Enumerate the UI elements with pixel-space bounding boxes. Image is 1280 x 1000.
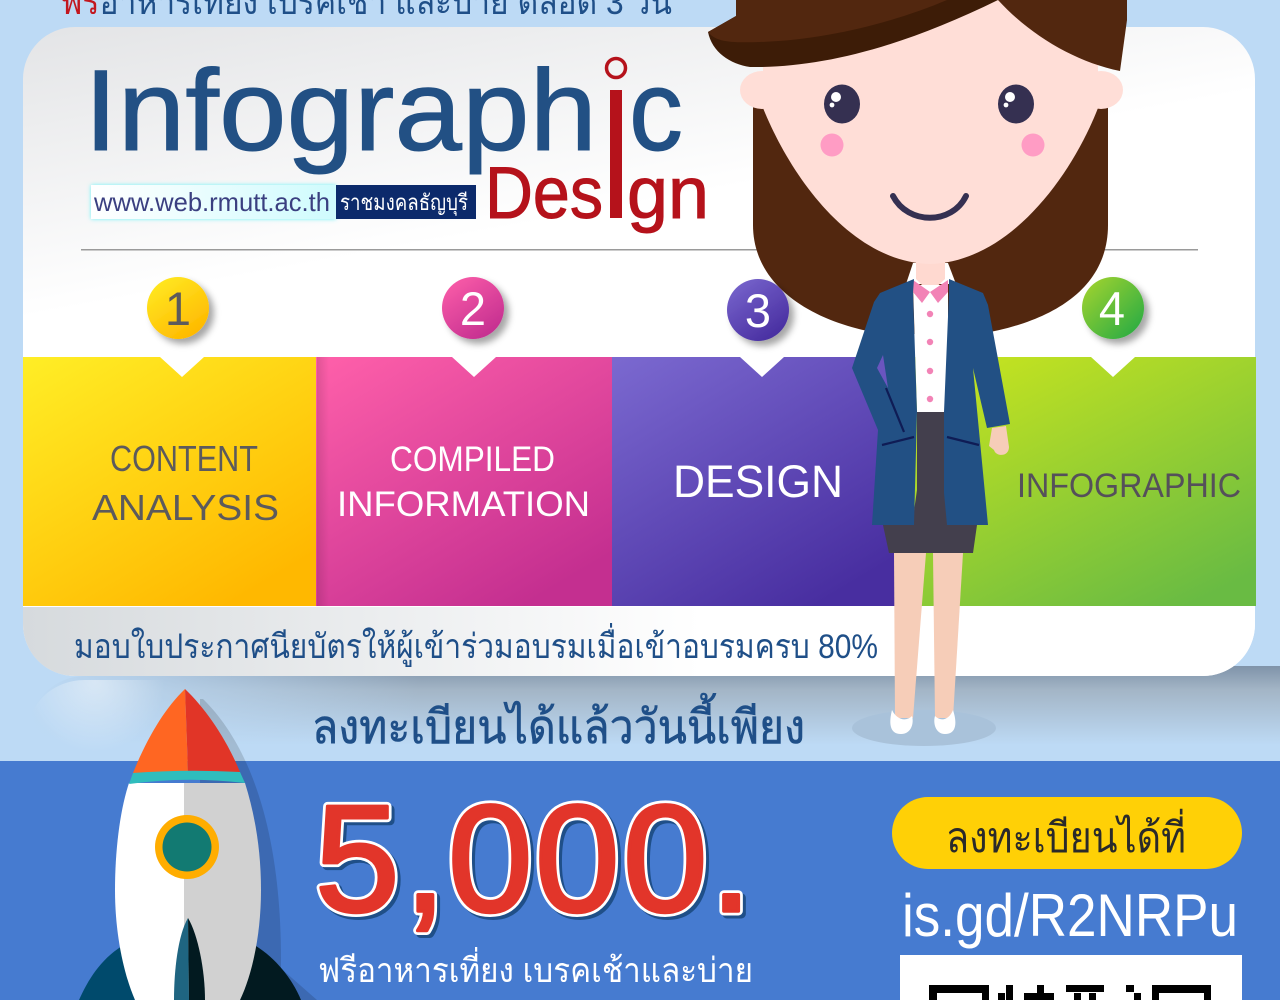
title: Infographic: Infograph <box>84 47 597 175</box>
register heading: ลงทะเบียนได้แล้ววันนี้เพียง <box>312 693 805 753</box>
badge 4 <box>1082 277 1144 339</box>
teal band <box>129 771 245 784</box>
rocket body <box>115 783 261 1000</box>
shoes <box>890 710 955 734</box>
blue price band <box>0 761 1280 1000</box>
badge 1: 1 <box>165 282 191 335</box>
certificate note: มอบใบประกาศนียบัตรให้ผู้เข้าร่วมอบรมเมื่อเข้าอบรมครบ 80% <box>74 623 878 667</box>
shirt <box>913 285 948 412</box>
card 2: COMPILED <box>390 440 555 479</box>
nose cone <box>133 689 240 773</box>
hair right <box>998 0 1127 71</box>
face <box>763 0 1098 264</box>
card 2: INFORMATION <box>337 485 590 524</box>
qr code <box>900 955 1242 1000</box>
card 1 <box>23 357 316 606</box>
divider <box>81 249 1198 250</box>
skirt <box>883 412 977 553</box>
character: woman in blazer <box>708 0 1127 746</box>
badge 3: 3 <box>745 284 771 337</box>
register pill <box>892 797 1242 869</box>
url badge <box>91 185 476 219</box>
pocket lines <box>882 388 979 445</box>
title: Infographic <box>84 47 683 218</box>
title: Design: gn <box>627 153 709 234</box>
badge 3 <box>727 279 789 341</box>
floor shadow <box>852 710 996 746</box>
arm gap <box>877 355 888 388</box>
neck and collar <box>906 258 956 293</box>
blazer <box>852 279 1010 525</box>
title: Infographic: c <box>629 47 683 175</box>
rocket <box>79 689 317 1000</box>
url badge: www.web.rmutt.ac.th <box>93 187 330 217</box>
side fins <box>79 946 301 1000</box>
centre fin <box>174 918 205 1000</box>
card 1: CONTENT <box>110 438 258 479</box>
title: Design: Des <box>485 153 603 234</box>
price: 5,000. <box>315 774 752 944</box>
panel: course steps <box>23 27 1256 676</box>
badge 2 <box>442 277 504 339</box>
card 1: ANALYSIS <box>92 487 279 528</box>
card 2 <box>316 357 612 606</box>
hair back <box>753 90 1108 334</box>
badge 2: 2 <box>460 282 486 335</box>
hand <box>989 426 1009 455</box>
ears <box>740 71 1123 109</box>
pink collar <box>913 280 948 303</box>
rocket shadow <box>200 699 281 1000</box>
title: Design <box>485 153 709 234</box>
panel shadow and reflection <box>20 666 1280 761</box>
card 4: INFOGRAPHIC <box>1017 467 1241 505</box>
legs <box>894 553 963 718</box>
price: 5,000. <box>318 777 755 947</box>
card 3 <box>612 357 905 606</box>
price: 5,000. <box>315 774 752 944</box>
price includes: ฟรีอาหารเที่ยง เบรคเช้าและบ่าย <box>318 947 753 990</box>
smile <box>893 196 966 218</box>
shirt buttons <box>927 311 933 402</box>
url badge: ราชมงคลธัญบุรี <box>340 190 468 216</box>
card 4 <box>905 357 1256 606</box>
badge 1 <box>147 277 209 339</box>
card 3: DESIGN <box>673 456 843 507</box>
register pill: ลงทะเบียนได้ที่ <box>946 809 1186 861</box>
badge 4: 4 <box>1099 282 1125 335</box>
panel footer strip <box>23 607 1255 676</box>
short url: is.gd/R2NRPu <box>902 882 1238 949</box>
eyes <box>824 84 1034 124</box>
window <box>155 815 219 879</box>
cheeks <box>820 134 1044 156</box>
fringe <box>708 0 998 67</box>
